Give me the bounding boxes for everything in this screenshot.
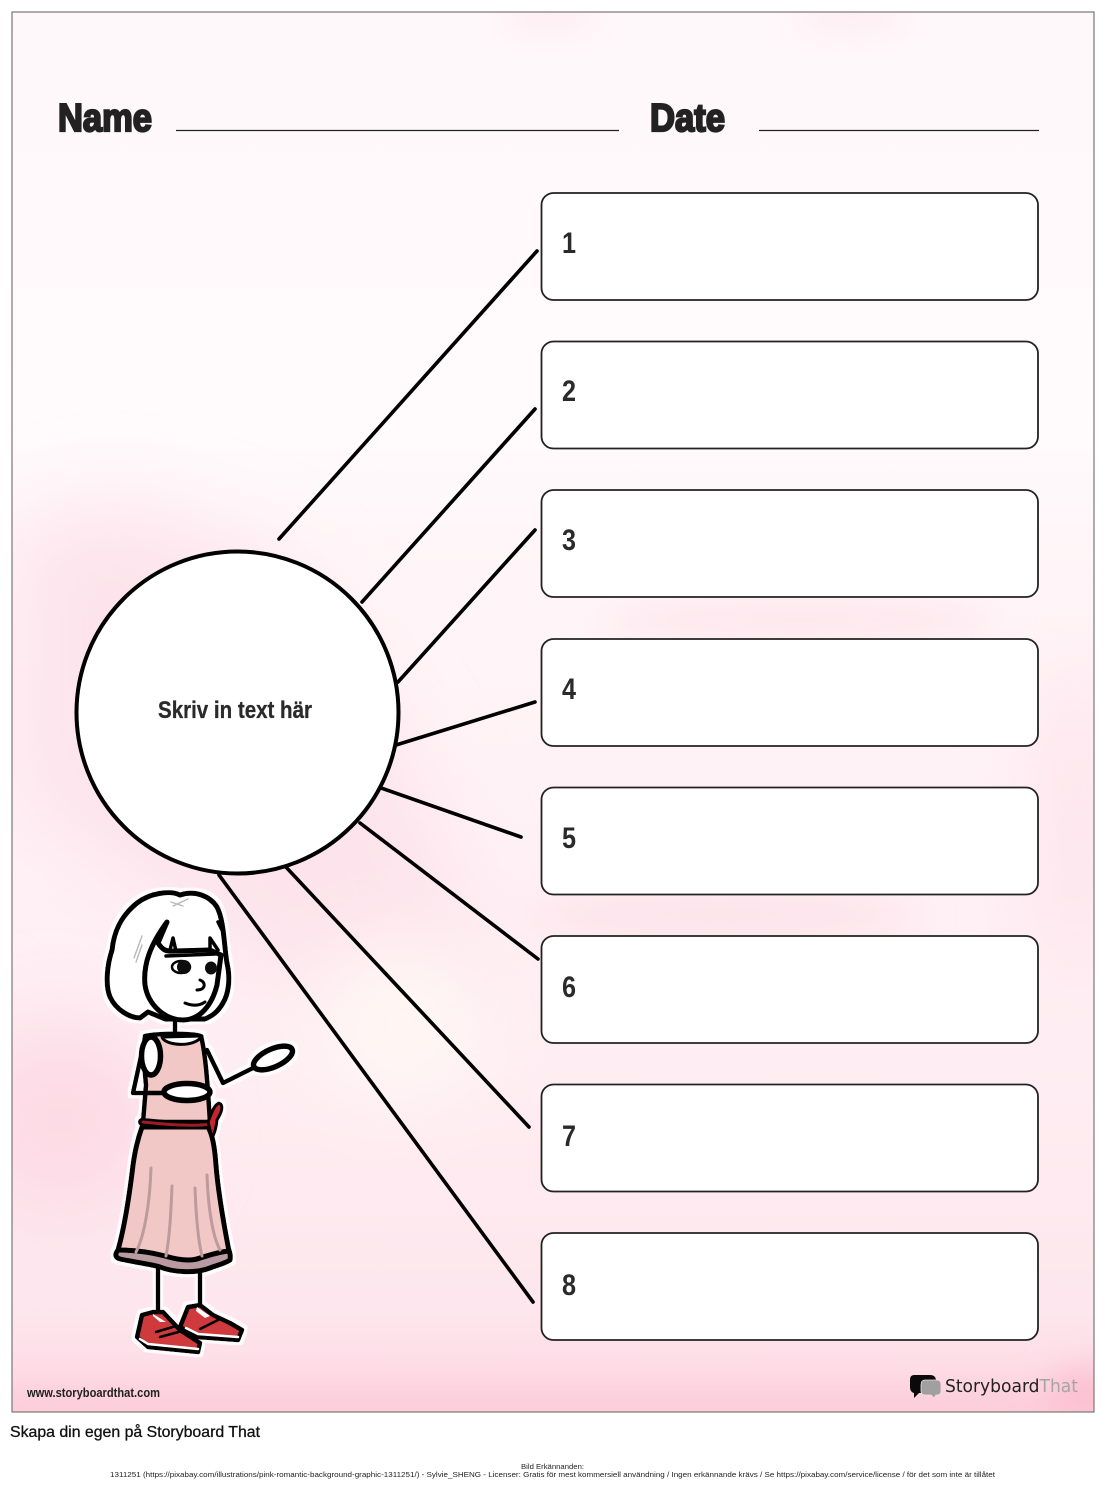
skirt hem band [116, 1248, 230, 1272]
box 7 [542, 1084, 1038, 1192]
connector lines from circle to boxes [219, 251, 538, 1302]
skirt folds [136, 1168, 220, 1256]
legs [158, 1268, 200, 1316]
left arm and sleeve [133, 1037, 210, 1100]
belt and bow [142, 1103, 222, 1138]
box 4: 4 [562, 673, 576, 706]
website url: www.storyboardthat.com [26, 1385, 160, 1400]
icon: speech bubbles [910, 1375, 941, 1398]
skirt [118, 1127, 229, 1260]
central circle [76, 552, 398, 874]
eyes [172, 960, 217, 974]
footer call to action: Skapa din egen på Storyboard That [10, 1423, 261, 1441]
right shoe [180, 1305, 242, 1340]
hair strand marks [134, 899, 188, 962]
nose and mouth [185, 980, 205, 1005]
image credits: 1311251 (https://pixabay.com/illustrations/pink-romantic-background-graphic-1311251/) - Sylvie_SHENG - Licenser: Gratis för mest kommersiell användning / Ingen erkännande krävs / Se https://pixabay.com/service/license / för det som inte är tillåtet [110, 1470, 996, 1479]
box 6 [542, 936, 1038, 1043]
left shoe [137, 1312, 200, 1352]
image credits [110, 1462, 996, 1479]
box 5 [542, 788, 1038, 894]
box 8: 8 [562, 1269, 576, 1302]
right arm and hand [207, 1041, 296, 1083]
box 3: 3 [562, 524, 576, 557]
box 1 [542, 193, 1038, 300]
logo wordmark: StoryboardThat [945, 1376, 1078, 1397]
face [145, 922, 221, 1020]
box 6: 6 [562, 971, 576, 1004]
Storyboard That logo [910, 1375, 1078, 1398]
neck [173, 1020, 177, 1036]
illustration: girl in pink dress [107, 893, 296, 1352]
box 4 [542, 639, 1038, 746]
hair [107, 893, 229, 1019]
box 7: 7 [562, 1120, 576, 1153]
box 2: 2 [562, 375, 576, 408]
image credits: Bild Erkännanden: [521, 1462, 584, 1471]
box 1: 1 [562, 227, 576, 260]
collar [162, 1036, 202, 1044]
central circle: Skriv in text här [158, 697, 312, 724]
fringe line [166, 922, 222, 956]
box 8 [542, 1233, 1038, 1340]
bodice [143, 1034, 210, 1122]
box 5: 5 [562, 822, 576, 855]
box 2 [542, 342, 1038, 448]
heading: name field: Name [58, 97, 152, 140]
box 3 [542, 490, 1038, 597]
heading: date field: Date [650, 97, 725, 140]
